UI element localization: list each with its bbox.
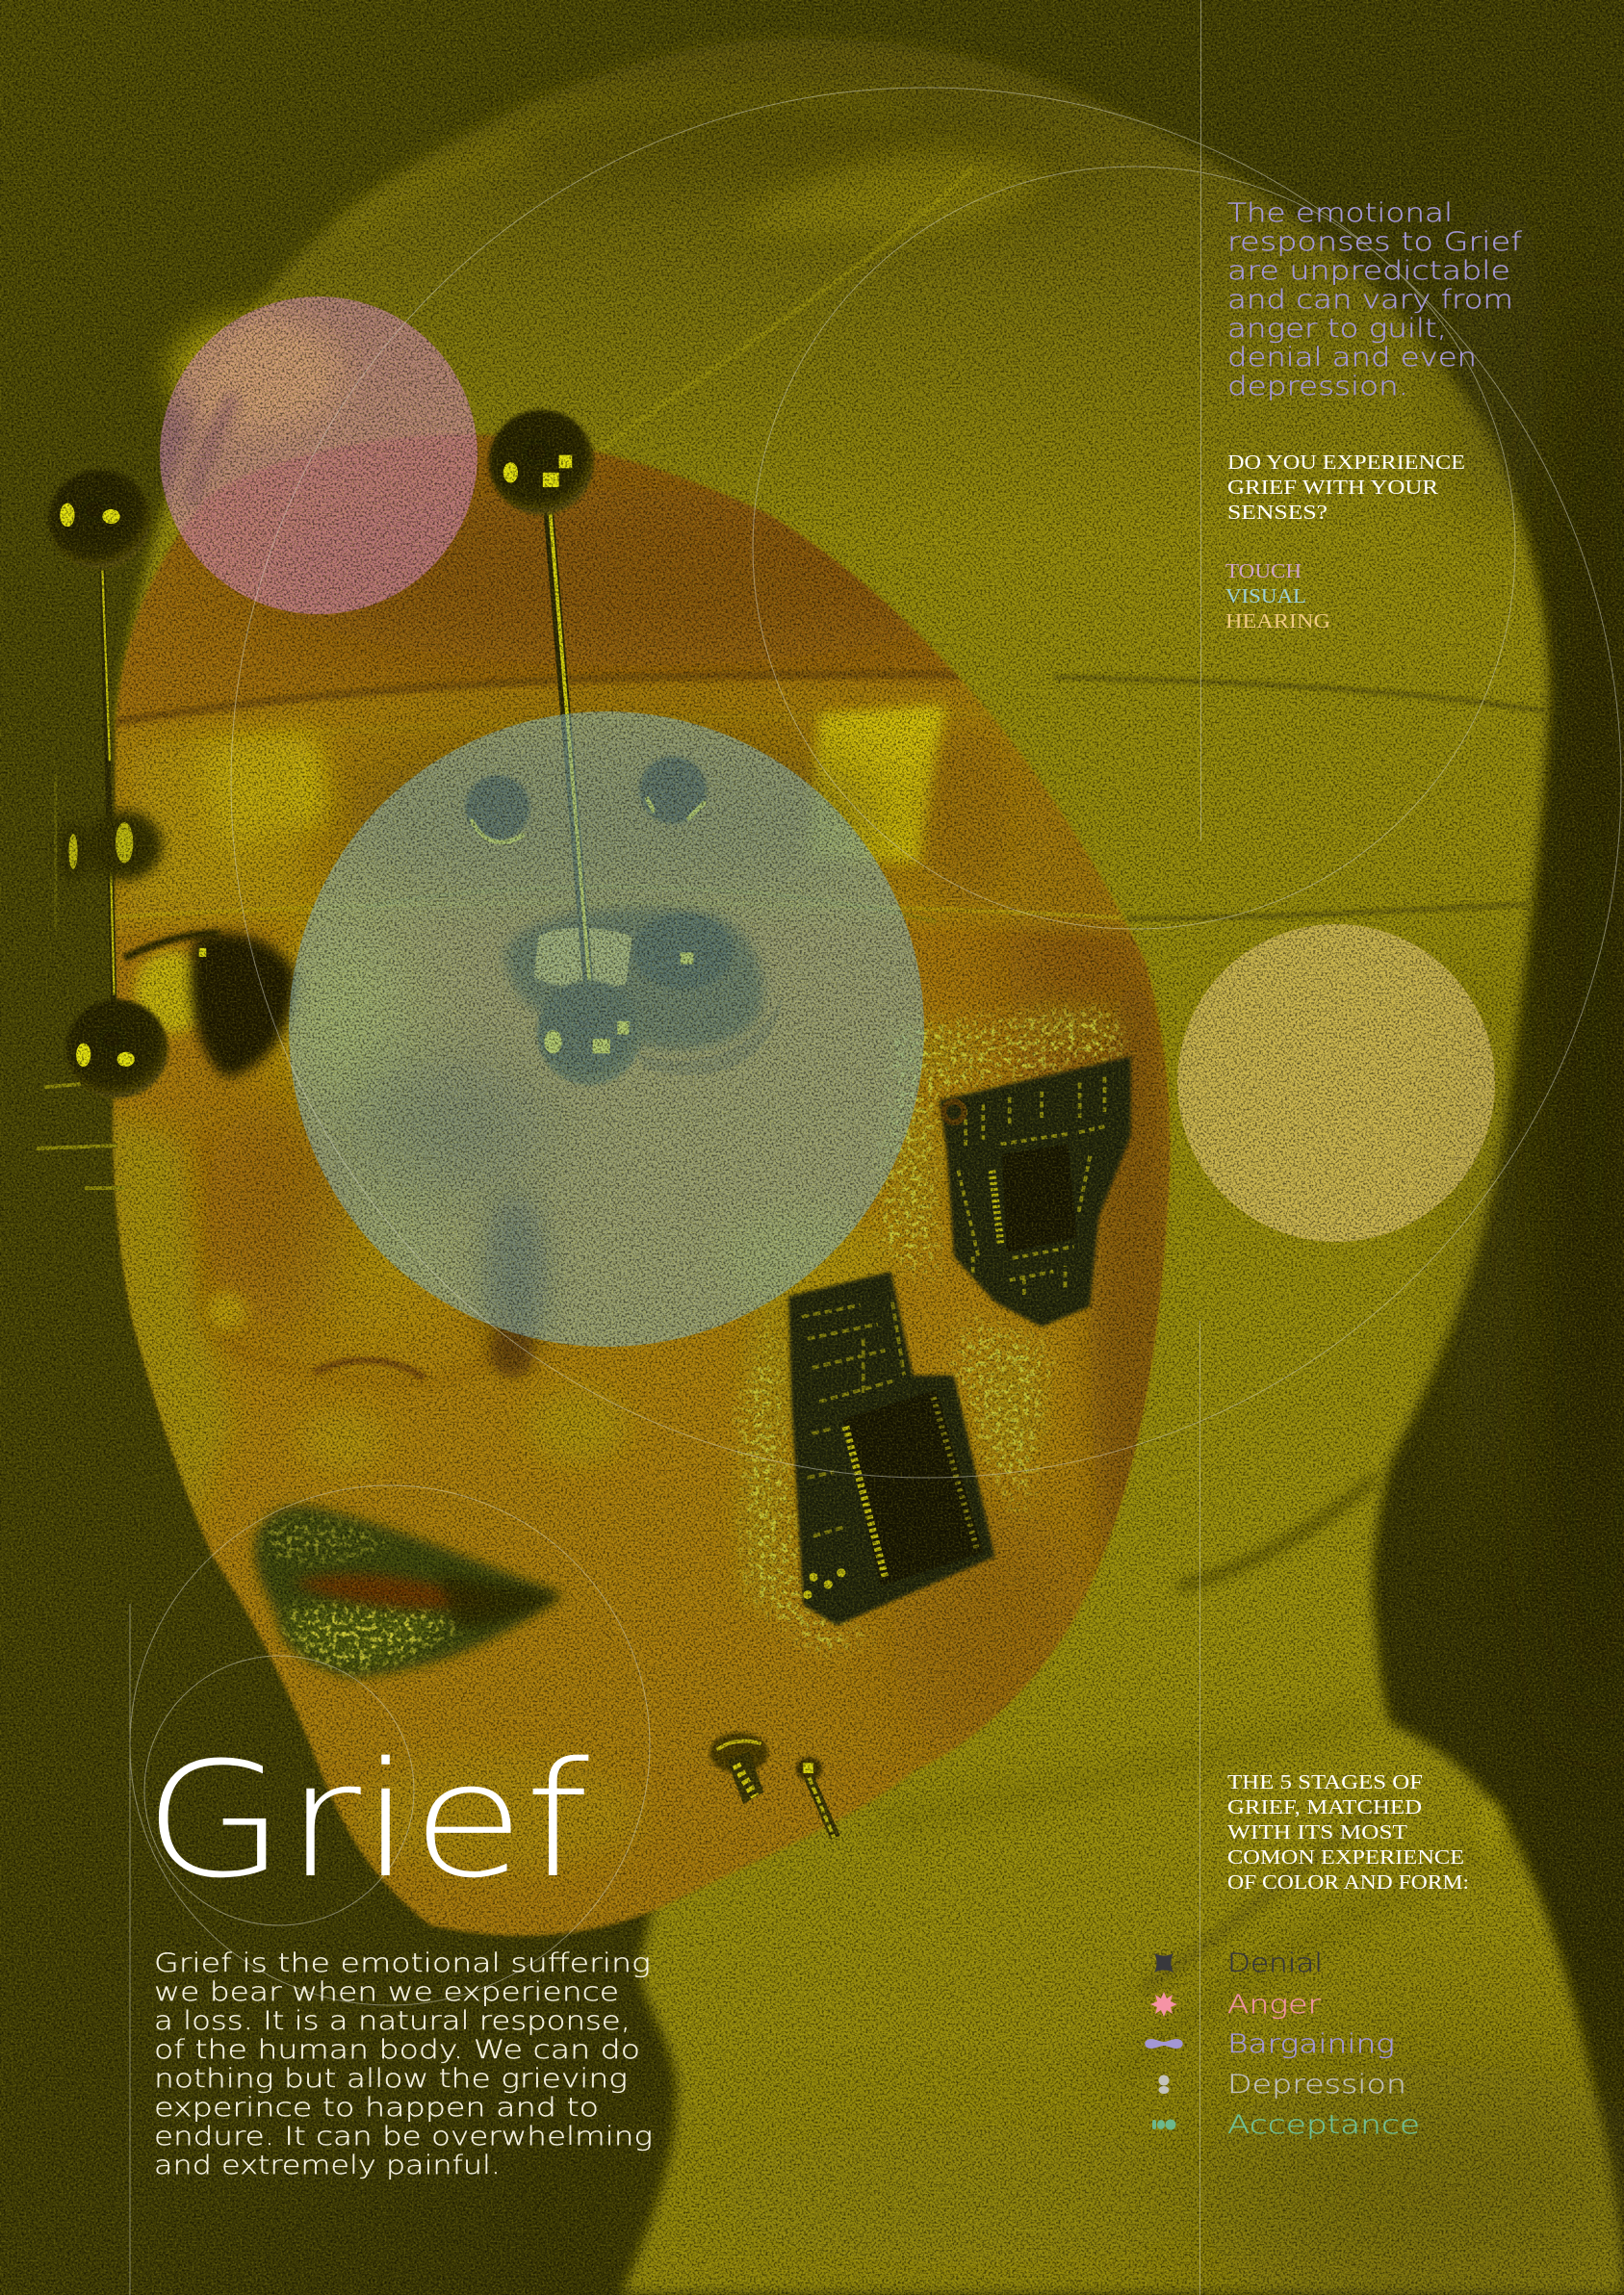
left eye bbox=[124, 933, 296, 1078]
lips bbox=[254, 1506, 563, 1678]
icon: anger bbox=[1150, 1992, 1177, 2017]
lavender paragraph: and can vary from bbox=[1227, 285, 1513, 315]
screws bbox=[709, 1732, 836, 1838]
label: anger: Anger bbox=[1227, 1990, 1322, 2020]
senses list: TOUCH bbox=[1225, 559, 1302, 582]
colored circle: yellow bbox=[1177, 924, 1495, 1242]
yellow specks around circuit boards bbox=[740, 1010, 1121, 1610]
intro text block: of the human body. We can do bbox=[154, 2035, 640, 2065]
intro text block bbox=[154, 1948, 653, 2180]
colored circle: blue bbox=[289, 711, 924, 1347]
intro text block: nothing but allow the grieving bbox=[154, 2064, 628, 2094]
senses question: SENSES? bbox=[1227, 501, 1328, 524]
icon: acceptance bbox=[1152, 2120, 1176, 2129]
colored circle: pink bbox=[160, 297, 477, 614]
lavender paragraph: responses to Grief bbox=[1227, 227, 1523, 257]
intro text block: endure. It can be overwhelming bbox=[154, 2122, 653, 2152]
label: depression: Depression bbox=[1227, 2070, 1406, 2100]
lit and shaded passages beneath the blue circle bbox=[337, 738, 892, 900]
intro text block: a loss. It is a natural response, bbox=[154, 2006, 631, 2036]
senses question: DO YOU EXPERIENCE bbox=[1227, 451, 1465, 474]
senses question: GRIEF WITH YOUR bbox=[1227, 476, 1438, 499]
stages heading: WITH ITS MOST bbox=[1227, 1820, 1407, 1844]
intro text block: we bear when we experience bbox=[154, 1977, 619, 2007]
senses list bbox=[1225, 559, 1330, 632]
lavender paragraph: The emotional bbox=[1227, 198, 1453, 228]
icon: bargaining bbox=[1145, 2039, 1183, 2049]
headband bbox=[102, 680, 1141, 937]
stages heading bbox=[1227, 1770, 1469, 1894]
intro text block: experince to happen and to bbox=[154, 2093, 599, 2123]
lavender paragraph: are unpredictable bbox=[1227, 256, 1510, 286]
stages heading: COMON EXPERIENCE bbox=[1227, 1845, 1464, 1869]
lavender paragraph: depression. bbox=[1227, 372, 1408, 401]
stages heading: THE 5 STAGES OF bbox=[1227, 1770, 1423, 1793]
circuit board upper bbox=[940, 1056, 1131, 1327]
face bbox=[113, 434, 1170, 1936]
hood folds and shadows bbox=[512, 99, 1092, 205]
legend: five stages bbox=[1145, 1948, 1420, 2140]
circuit board lower bbox=[788, 1272, 994, 1625]
intro text block: Grief is the emotional suffering bbox=[154, 1948, 651, 1978]
pins bbox=[37, 410, 642, 1188]
label: denial: Denial bbox=[1227, 1948, 1323, 1978]
lavender paragraph bbox=[1227, 198, 1523, 401]
shading inside face bbox=[88, 490, 1177, 1872]
icon: denial bbox=[1154, 1953, 1173, 1973]
lavender paragraph: denial and even bbox=[1227, 343, 1477, 373]
stages heading: GRIEF, MATCHED bbox=[1227, 1795, 1422, 1818]
intro text block: and extremely painful. bbox=[154, 2151, 501, 2180]
senses list: HEARING bbox=[1225, 609, 1330, 632]
senses question bbox=[1227, 451, 1465, 524]
label: bargaining: Bargaining bbox=[1227, 2029, 1395, 2059]
lavender paragraph: anger to guilt, bbox=[1227, 314, 1447, 344]
label: acceptance: Acceptance bbox=[1227, 2110, 1420, 2140]
senses list: VISUAL bbox=[1225, 584, 1306, 607]
right eye, small spheres bbox=[366, 757, 937, 1075]
cheek and nose bbox=[199, 1134, 506, 1382]
title: Grief bbox=[143, 1728, 589, 1913]
icon: depression bbox=[1159, 2076, 1169, 2094]
stages heading: OF COLOR AND FORM: bbox=[1227, 1870, 1469, 1894]
